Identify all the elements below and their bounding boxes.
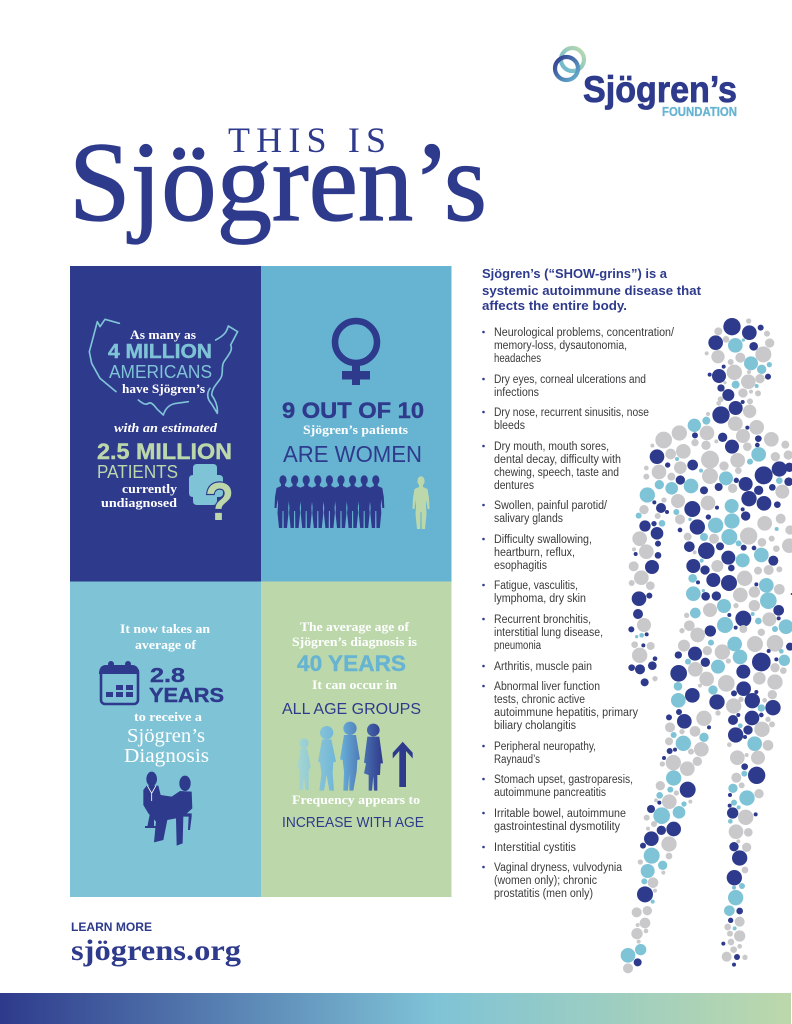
symptom list: Fatigue, vasculitis,: [494, 580, 578, 592]
learn more link: LEARN MORE: [71, 920, 152, 934]
icon: medical cross with question mark: ?: [205, 472, 234, 532]
symptom list: chewing, speech, taste and: [494, 467, 619, 479]
icon: nine women silhouettes: [274, 475, 384, 528]
symptom list: autoimmune hepatitis, primary: [494, 707, 638, 719]
panel: 4 million Americans: [70, 266, 261, 582]
symptom list: headaches: [494, 353, 541, 365]
symptom list: Interstitial cystitis: [494, 842, 576, 854]
panel: 4 million Americans: currently: [122, 481, 178, 496]
symptom list: interstitial lung disease,: [494, 627, 603, 639]
icon: doctor and patient: [143, 772, 192, 846]
symptom list: Dry nose, recurrent sinusitis, nose: [494, 407, 649, 419]
logo: Sjögren's Foundation: FOUNDATION: [662, 105, 737, 119]
panel: 4 million Americans: have Sjögren’s: [122, 381, 205, 396]
logo: Sjögren's Foundation: [555, 48, 737, 119]
panel: average age of diagnosis: Sjögren’s diagnosis is: [292, 634, 417, 649]
symptom list: Vaginal dryness, vulvodynia: [494, 862, 623, 874]
panel: 2.8 years to diagnosis: YEARS: [149, 685, 224, 707]
panel: average age of diagnosis: [261, 582, 452, 897]
symptom list: Recurrent bronchitis,: [494, 614, 591, 626]
symptom list: Peripheral neuropathy,: [494, 741, 596, 753]
title: THIS IS: [228, 120, 386, 160]
symptom list: Dry mouth, mouth sores,: [494, 441, 609, 453]
panel: 4 million Americans: undiagnosed: [101, 495, 178, 510]
icon: USA map outline: [89, 319, 238, 415]
symptom list: Neurological problems, concentration/: [494, 327, 675, 339]
symptom list: salivary glands: [494, 513, 563, 525]
panel: 9 out of 10 women: 9 OUT OF 10: [282, 398, 424, 423]
icon: medical cross with question mark: [189, 464, 234, 532]
panel: 9 out of 10 women: ARE WOMEN: [283, 441, 422, 467]
intro text: Sjögren’s (“SHOW-grins”) is a: [482, 266, 668, 281]
symptom list: gastrointestinal dysmotility: [494, 821, 620, 833]
panel: 4 million Americans: AMERICANS: [109, 362, 212, 382]
panel: average age of diagnosis: Frequency appears to: [292, 792, 420, 807]
bottom gradient bar: [0, 993, 791, 1024]
symptom list: infections: [494, 387, 539, 399]
panel: average age of diagnosis: The average age of: [300, 619, 410, 634]
panel: 2.8 years to diagnosis: Diagnosis: [124, 745, 209, 767]
panel: 2.8 years to diagnosis: average of: [135, 637, 197, 652]
panel: 4 million Americans: 2.5 MILLION: [97, 439, 232, 464]
intro text: [482, 266, 702, 313]
symptom list: biliary cholangitis: [494, 720, 576, 732]
symptom list: Stomach upset, gastroparesis,: [494, 774, 633, 786]
panel: 4 million Americans: PATIENTS: [97, 462, 178, 482]
symptom list: memory-loss, dysautonomia,: [494, 340, 627, 352]
learn more link: [71, 920, 241, 967]
panel: 4 million Americans: 4 MILLION: [108, 341, 212, 363]
panel: 2.8 years to diagnosis: Sjögren’s: [127, 725, 205, 747]
symptom list: (women only); chronic: [494, 875, 597, 887]
panel: average age of diagnosis: It can occur in: [312, 677, 398, 692]
symptom list: esophagitis: [494, 560, 547, 572]
panel: 9 out of 10 women: [261, 266, 452, 582]
symptom list: Arthritis, muscle pain: [494, 661, 592, 673]
symptom list: Difficulty swallowing,: [494, 534, 592, 546]
title: Sjögren’s: [69, 120, 487, 245]
symptom list: autoimmune pancreatitis: [494, 787, 606, 799]
panel: 4 million Americans: with an estimated: [114, 420, 218, 435]
panel: average age of diagnosis: 40 YEARS: [297, 651, 406, 676]
panel: 2.8 years to diagnosis: to receive a: [134, 709, 203, 724]
panel: average age of diagnosis: INCREASE WITH AGE: [282, 815, 424, 831]
logo: Sjögren's Foundation: Sjögren’s: [583, 69, 737, 110]
symptom list: Irritable bowel, autoimmune: [494, 808, 626, 820]
icon: up arrow: [393, 742, 413, 787]
symptom list: Dry eyes, corneal ulcerations and: [494, 374, 646, 386]
symptom list: lymphoma, dry skin: [494, 593, 586, 605]
symptom list: Raynaud’s: [494, 754, 540, 766]
icon: female symbol: [335, 321, 377, 385]
symptom list: dental decay, difficulty with: [494, 454, 621, 466]
bubble body figure: [621, 318, 792, 973]
learn more link: sjögrens.org: [71, 934, 241, 967]
intro text: systemic autoimmune disease that: [482, 283, 702, 298]
symptom list: Swollen, painful parotid/: [494, 500, 608, 512]
symptom list: Abnormal liver function: [494, 681, 600, 693]
symptom list: bleeds: [494, 420, 525, 432]
symptom list: pneumonia: [494, 640, 541, 652]
symptom list: tests, chronic active: [494, 694, 585, 706]
symptom list: prostatitis (men only): [494, 888, 593, 900]
symptom list: [482, 327, 675, 900]
panel: 2.8 years to diagnosis: It now takes an: [120, 621, 211, 636]
symptom list: dentures: [494, 480, 534, 492]
icon: four female figures by age: [297, 722, 383, 791]
panel: 2.8 years to diagnosis: 2.8: [150, 665, 185, 687]
icon: one man silhouette: [412, 476, 430, 529]
panel: average age of diagnosis: ALL AGE GROUPS: [282, 701, 421, 718]
panel: 4 million Americans: As many as: [130, 327, 196, 342]
symptom list: heartburn, reflux,: [494, 547, 575, 559]
icon: calendar: [99, 661, 139, 704]
panel: 2.8 years to diagnosis: [70, 582, 261, 897]
panel: 9 out of 10 women: Sjögren’s patients: [303, 422, 408, 437]
intro text: affects the entire body.: [482, 298, 627, 313]
